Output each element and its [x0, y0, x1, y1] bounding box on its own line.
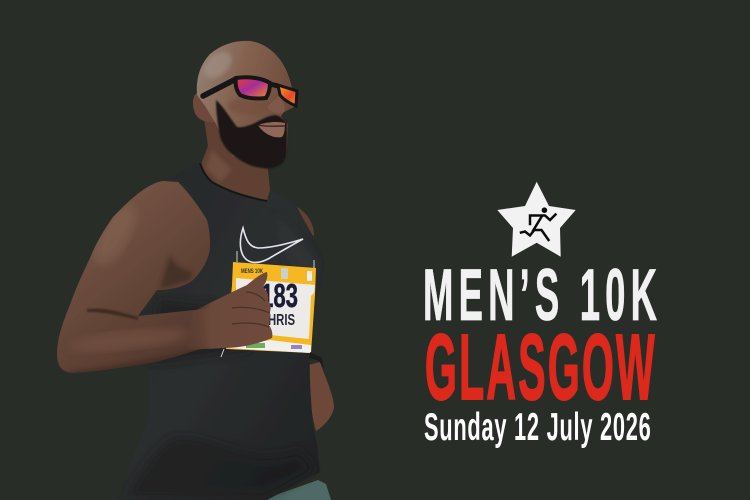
shorts [262, 480, 331, 500]
star icon [497, 182, 576, 257]
beard [216, 100, 287, 169]
lips [258, 122, 285, 137]
safety pins [221, 251, 314, 357]
neckline [200, 163, 267, 201]
bib small logo [307, 271, 312, 281]
bib yellow card [226, 262, 316, 353]
bib header text: MENS 10K [241, 269, 263, 275]
head [193, 41, 296, 169]
runner icon [521, 207, 556, 240]
highlight on shoulder [96, 208, 134, 263]
bib QR code [281, 268, 288, 279]
tank shading [150, 300, 260, 363]
arm [57, 181, 210, 373]
poster [57, 40, 657, 500]
sunglasses [203, 77, 297, 106]
sponsor logo 2 [291, 345, 302, 349]
forehead highlight [199, 47, 237, 83]
runner photo illustration [57, 41, 334, 500]
skull and face [197, 41, 296, 168]
tank top [122, 163, 325, 500]
ear [193, 93, 214, 122]
neck [200, 118, 270, 201]
cheek shading [228, 97, 272, 115]
bicep crease shadow [87, 309, 138, 320]
neck highlight [206, 150, 232, 182]
bib number: 183 [261, 277, 298, 314]
right shoulder [297, 207, 314, 236]
event logo text block [423, 182, 657, 449]
watch [309, 352, 324, 369]
forearm highlight [76, 328, 188, 351]
heading: Glasgow: GLASGOW [425, 316, 655, 420]
left lens [236, 77, 270, 98]
nose [267, 96, 285, 113]
right lens [278, 85, 297, 106]
glasses temple [203, 79, 236, 96]
hand [186, 272, 272, 350]
bib bottom strip [226, 340, 311, 353]
swoosh logo [240, 228, 303, 263]
upper arm and forearm [57, 181, 262, 373]
bib white panel [236, 278, 315, 341]
lower hand [308, 362, 334, 431]
race bib [221, 251, 316, 357]
armpit shadow [160, 255, 192, 289]
sponsor logo [246, 343, 265, 348]
underside forearm shadow [68, 350, 197, 373]
bib name: HRIS [268, 312, 295, 329]
bridge [270, 84, 278, 86]
event date: Sunday 12 July 2026 [424, 404, 651, 449]
heading: Men's 10K: MEN’S 10K [423, 255, 657, 336]
